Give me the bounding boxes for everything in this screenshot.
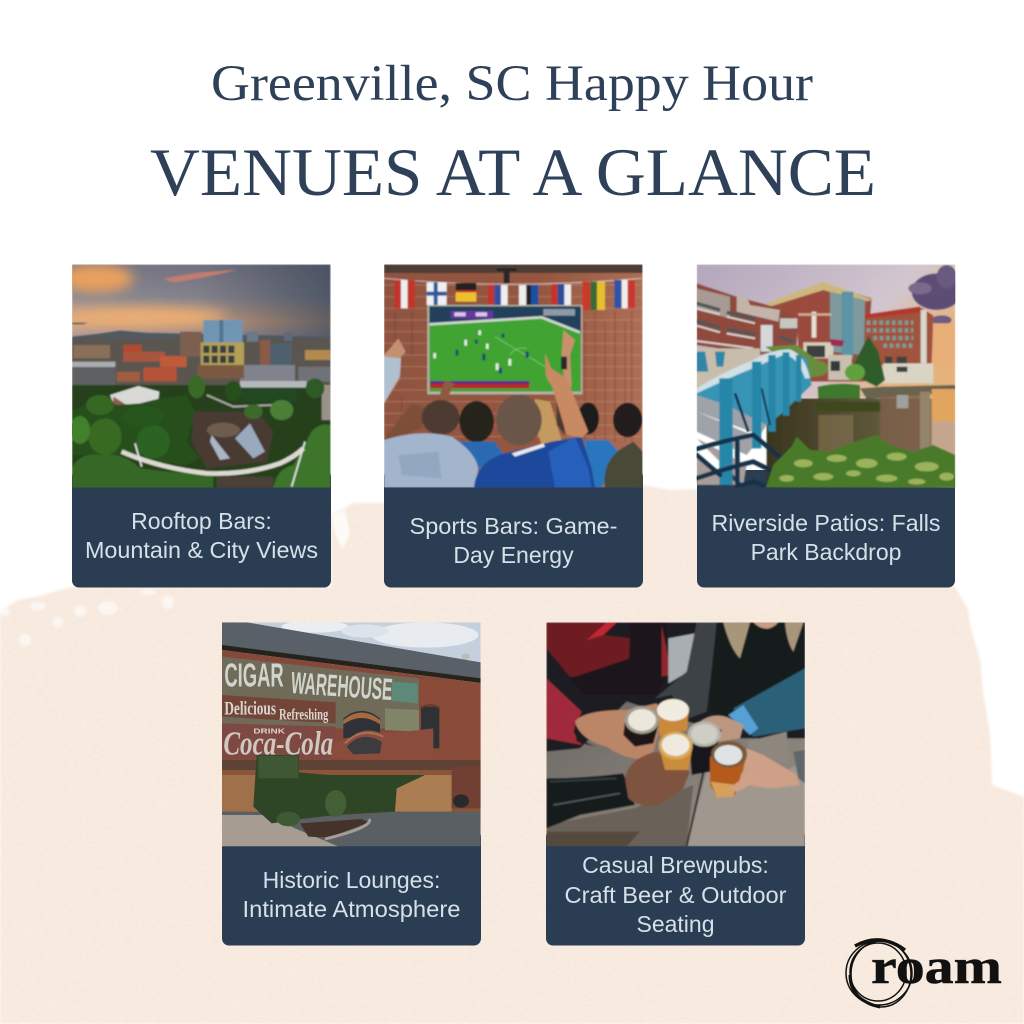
photo: Cigar Warehouse brick building: DRINK [253,726,286,735]
logo wordmark: roam [871,938,1002,994]
photo: Cigar Warehouse brick building: CIGAR [224,657,284,694]
label text [410,513,618,568]
water [767,398,955,488]
label text: Casual Brewpubs: [582,852,769,878]
label text: Sports Bars: Game- [410,513,618,539]
label panel [222,830,481,946]
left hand [384,338,406,403]
building center [772,289,872,382]
bridge [696,347,761,388]
label panel [72,470,331,588]
label panel [384,470,643,588]
right building [865,308,933,365]
photo: friends toasting craft beers [546,622,805,846]
blue sleeve [733,668,805,737]
label text [242,867,460,922]
card: historic lounges [222,621,481,946]
photo: Falls Park bridge and buildings [697,264,962,488]
label text [85,508,318,563]
peach brush stroke background [0,480,1024,1024]
label text: Mountain & City Views [85,537,318,563]
label text: Historic Lounges: [263,867,440,893]
photo: Cigar Warehouse brick building: Refreshing [279,707,328,724]
label text: Rooftop Bars: [131,508,272,534]
label text: Seating [636,911,715,937]
card: casual brewpubs [546,622,805,946]
beers [688,723,722,775]
photo: Cigar Warehouse brick building: WAREHOUSE [290,666,394,707]
card: rooftop bars [60,264,331,588]
red jacket [546,622,630,677]
label panel [546,830,805,946]
title [150,56,876,210]
label text [712,510,940,565]
TV [427,305,582,394]
card: sports bars [384,264,643,588]
photo: Cigar Warehouse brick building: Delicious [224,698,276,719]
label text: Craft Beer & Outdoor [564,882,787,908]
label text: Intimate Atmosphere [242,896,460,922]
logo rings [846,940,912,1007]
grey + dark jacket [655,622,717,718]
photo: Greenville skyline at sunset [60,264,331,488]
flags [394,280,402,308]
label text: Park Backdrop [751,539,901,565]
hands [575,703,663,759]
bushes [766,435,955,488]
people [439,380,455,396]
label text [564,852,787,937]
left building [697,283,798,355]
label text: Day Energy [453,542,574,568]
photo: Cigar Warehouse brick building [222,621,481,846]
raised arm far right [562,330,575,387]
tree [853,336,885,387]
card: riverside patios [697,264,962,588]
title line 1: Greenville, SC Happy Hour [211,56,813,112]
ground [222,812,481,846]
label panel [697,470,955,588]
label text: Riverside Patios: Falls [712,510,940,536]
table [546,702,805,846]
title line 2: VENUES AT A GLANCE [150,134,876,210]
photo: fans watching soccer on a TV [384,264,643,488]
logo: roam [846,938,1002,1007]
photo: Cigar Warehouse brick building: Coca-Cola [223,725,333,762]
